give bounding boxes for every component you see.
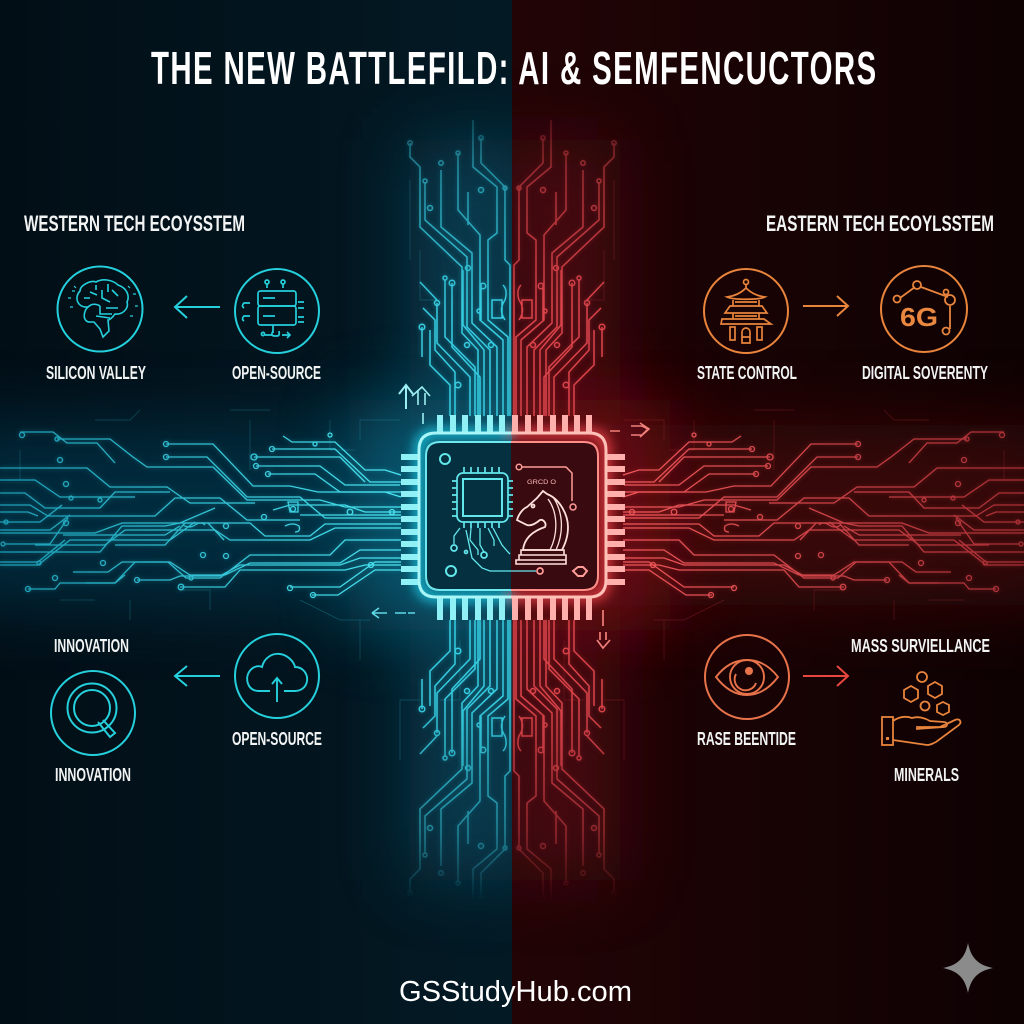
chip body: [426, 442, 511, 590]
icon: cloud upload: [235, 634, 319, 718]
small arrows: bottom right: [597, 610, 610, 648]
icon: quantum Q: [51, 671, 135, 755]
label: state control: STATE CONTROL: [697, 363, 797, 383]
icon: hand with minerals: [882, 672, 960, 745]
small arrows: top left: [399, 385, 430, 424]
block: open-source cloud: [232, 634, 322, 749]
circuit traces: east horizontal: [564, 180, 1024, 760]
circuit traces: west horizontal: [0, 180, 460, 760]
label: innovation bottom: INNOVATION: [55, 765, 131, 785]
central chip: [401, 415, 625, 620]
icon: pagoda: [704, 269, 788, 353]
footer: website: GSStudyHub.com: [399, 976, 632, 1008]
block: innovation: [51, 671, 135, 785]
arrow: open-source to silicon valley: [175, 296, 220, 318]
label: innovation top: INNOVATION: [54, 636, 129, 656]
title: THE NEW BATTLEFILD: AI & SEMFENCUCTORS: [151, 44, 876, 95]
chip pins: west: [401, 415, 505, 620]
chip pins: east: [512, 415, 625, 620]
block: silicon valley: [46, 266, 146, 383]
label: open-source bottom: OPEN-SOURCE: [232, 729, 322, 749]
label: silicon valley: SILICON VALLEY: [46, 363, 146, 383]
block: state control: [697, 269, 797, 383]
block: digital sovereignty: [862, 266, 988, 383]
arrow: cloud to innovation: [175, 666, 220, 686]
icon: chess knight: [516, 491, 568, 564]
label: minerals: MINERALS: [894, 765, 959, 785]
small arrows: lower left: [372, 608, 415, 618]
small arrows: right: [610, 423, 649, 437]
icon: 6G network: 6G: [900, 302, 938, 332]
label: open-source: OPEN-SOURCE: [232, 363, 321, 383]
icon: server: [235, 269, 319, 353]
circuit traces: east vertical: [514, 120, 616, 916]
chip glow: [419, 433, 606, 597]
icon: small processor: [440, 454, 543, 576]
heading: western ecosystem: WESTERN TECH ECOYSSTEM: [24, 211, 245, 236]
block: rare earth eye: [697, 635, 796, 749]
icon: brain: [58, 266, 142, 352]
block: minerals: [882, 672, 960, 785]
block: open-source server: [232, 269, 321, 383]
chip frame: [419, 433, 606, 597]
label: rase beentide: RASE BEENTIDE: [697, 729, 796, 749]
icon: sparkle: [943, 943, 993, 993]
circuit traces: west vertical: [408, 120, 510, 916]
icon: eye: [705, 635, 789, 719]
chip east details: [516, 464, 587, 576]
chip east details: GRCD O: [527, 480, 556, 486]
arrow: state control to digital sovereignty: [803, 296, 848, 316]
arrow: eye to surveillance: [803, 666, 848, 686]
